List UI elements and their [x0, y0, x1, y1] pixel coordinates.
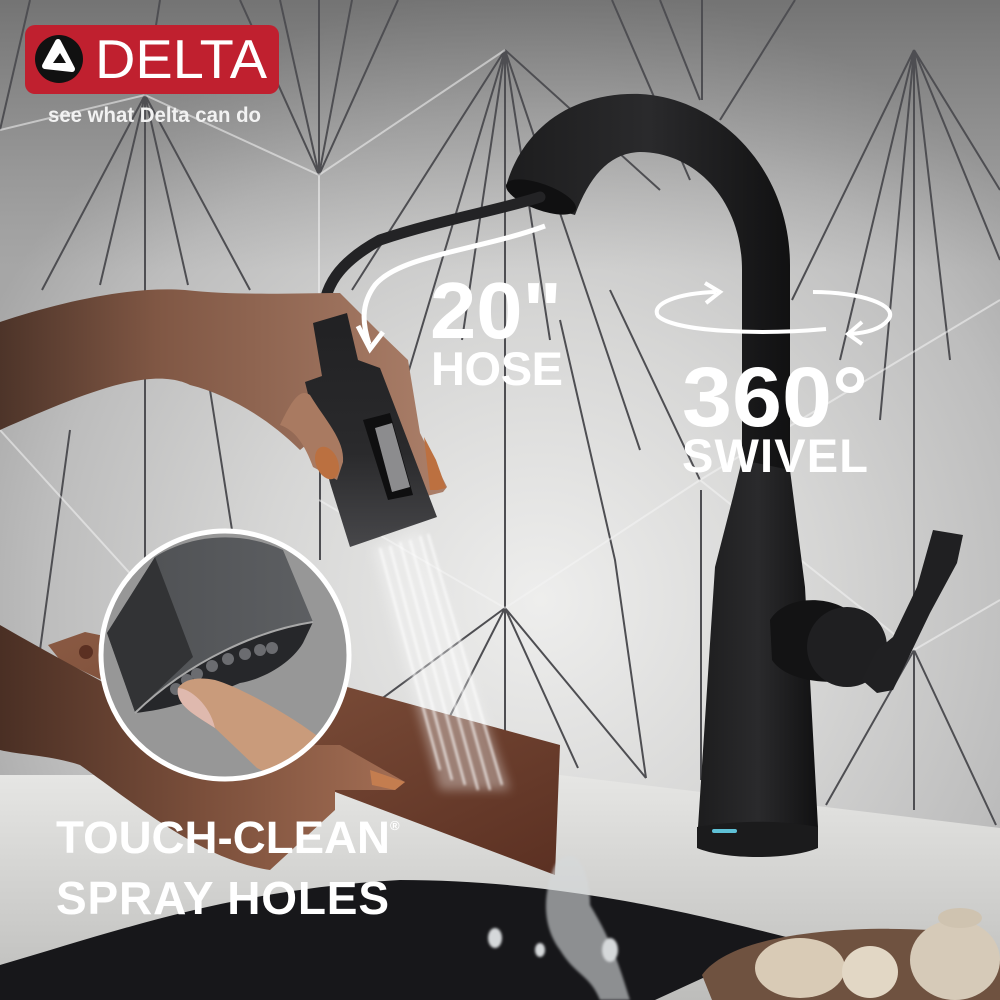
logo emblem [35, 35, 83, 83]
inset circle: spray holes close-up [101, 531, 349, 790]
icon: rotation arrows [657, 283, 890, 344]
callout: 20 inch hose: 20" [430, 266, 562, 355]
water spray [372, 530, 510, 790]
bowl of mushrooms [702, 908, 1000, 1000]
callout: touch-clean spray holes [56, 812, 400, 924]
brand logo [25, 25, 279, 127]
callout: 20 inch hose: HOSE [431, 342, 563, 395]
callout: 360 swivel [657, 283, 890, 482]
faucet: spout arch [507, 94, 790, 490]
faucet: handle [770, 530, 963, 693]
hose [322, 197, 540, 325]
callout: touch-clean spray holes: TOUCH-CLEAN [56, 812, 390, 863]
water falling into sink [488, 856, 630, 1000]
callout: touch-clean spray holes: ® [390, 818, 400, 833]
fingernail [370, 770, 405, 790]
thumb and fingernails [280, 393, 446, 490]
countertop [0, 775, 1000, 1000]
callout: 360 swivel: SWIVEL [682, 429, 868, 482]
callout: touch-clean spray holes: SPRAY HOLES [56, 872, 389, 924]
callout: 20 inch hose [358, 226, 563, 395]
spray head [305, 313, 437, 547]
callout: 360 swivel: 360° [682, 350, 868, 444]
brand logo: DELTA [95, 28, 267, 90]
cutting board [48, 632, 560, 875]
sink [0, 880, 790, 1000]
faucet [502, 94, 963, 857]
lower hand [0, 625, 405, 870]
faucet: base body [698, 460, 818, 827]
upper hand [0, 289, 447, 497]
tagline: see what Delta can do [48, 104, 261, 127]
